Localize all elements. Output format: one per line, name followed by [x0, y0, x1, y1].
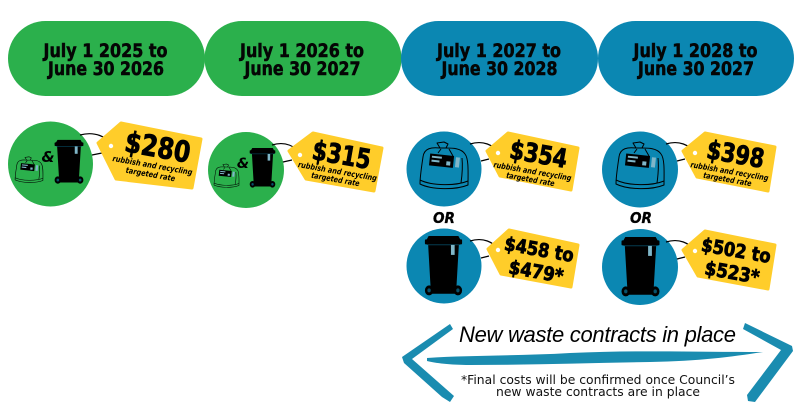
price tag: $398: targeted rate: [703, 171, 753, 188]
2027-28 bag option: [406, 132, 578, 206]
price tag: $398: $398: [704, 135, 767, 175]
price tag: $458 to $479*: $458 to: [503, 233, 575, 267]
icon: green circle with bag and bin: [208, 132, 284, 208]
2028 bag option: [602, 132, 775, 208]
header pill: July 1 2027 to June 30 2028: July 1 2027 to: [435, 40, 561, 62]
price tag: $315: $315: [310, 135, 373, 176]
price tag: $458 to $479*: $479*: [507, 256, 565, 288]
header pill: July 1 2028 to June 30 2027: July 1 2028 to: [632, 40, 758, 62]
price tag: $354: rubbish and recycling: [493, 160, 572, 183]
price tag: $502 to $523*: [666, 231, 775, 289]
2027-28 bin option: [406, 228, 578, 304]
price tag: $398: rubbish and recycling: [690, 160, 769, 183]
icon: green circle with bag and bin: &: [237, 156, 249, 172]
2026-27 bag and bin option: [208, 132, 382, 208]
price tag: $315: rubbish and recycling: [297, 160, 378, 183]
header pill: July 1 2025 to June 30 2026: June 30 2026: [46, 58, 164, 80]
footnote: *Final costs will be confirmed once Council’s: [461, 372, 735, 387]
icon: green circle with bag and bin: [8, 122, 93, 206]
price tag: $315: targeted rate: [311, 171, 361, 188]
price tag: $502 to $523*: $502 to: [700, 234, 772, 268]
icon: green circle with bag and bin: &: [41, 148, 55, 166]
footnote: new waste contracts are in place: [496, 384, 700, 399]
icon: blue circle with bag: [602, 132, 678, 208]
header pill: July 1 2025 to June 30 2026: July 1 2025 to: [42, 40, 168, 62]
2025-26 bag and bin option: [8, 122, 201, 206]
footnote: [461, 372, 735, 399]
icon: blue circle with bag: [406, 132, 482, 206]
header pill: July 1 2028 to June 30 2027: June 30 2027: [636, 58, 754, 80]
OR label: OR: [433, 209, 455, 227]
heading: New waste contracts in place: New waste contracts in place: [459, 322, 736, 347]
header pill: July 1 2027 to June 30 2028: [401, 21, 598, 96]
header pill: July 1 2028 to June 30 2027: [598, 21, 794, 96]
price tag: $280: targeted rate: [125, 166, 176, 183]
header pill: July 1 2027 to June 30 2028: June 30 2028: [440, 58, 558, 80]
price tag: $398: [666, 133, 775, 191]
price tag: $280: $280: [122, 125, 193, 170]
price tag: $502 to $523*: $523*: [703, 257, 761, 289]
icon: blue circle with bin: [602, 229, 678, 305]
price tag: $315: [272, 133, 382, 191]
brush arrow: new waste contracts span: [402, 323, 793, 402]
price tag: $458 to $479*: [470, 230, 578, 288]
price tag: $280: rubbish and recycling: [112, 154, 193, 177]
price tag: $280: [80, 123, 201, 188]
header pill: July 1 2026 to June 30 2027: [204, 21, 402, 96]
header pill: July 1 2026 to June 30 2027: June 30 2027: [243, 58, 360, 80]
header pill: July 1 2026 to June 30 2027: July 1 2026 to: [238, 40, 364, 62]
OR label: OR: [630, 209, 652, 227]
icon: blue circle with bin: [406, 228, 482, 304]
header pill: July 1 2025 to June 30 2026: [8, 21, 205, 96]
price tag: $354: targeted rate: [506, 171, 556, 188]
price tag: $354: $354: [507, 135, 570, 175]
2028 bin option: [602, 229, 775, 305]
price tag: $354: [470, 133, 578, 190]
